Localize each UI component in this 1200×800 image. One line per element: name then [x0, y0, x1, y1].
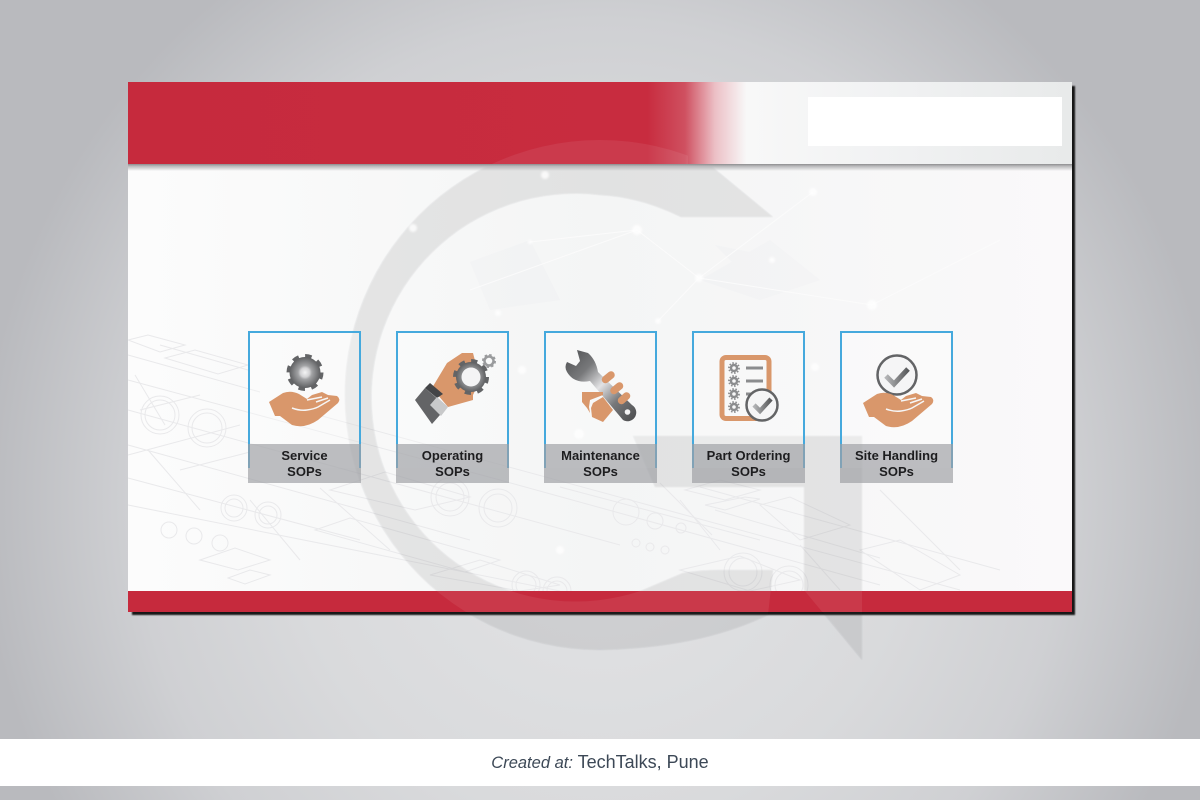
- label: Service SOPs: SOPs: [287, 464, 322, 479]
- label: Service SOPs: [248, 444, 361, 483]
- circuit pattern: [128, 335, 1000, 605]
- label: Part Ordering SOPs: Part Ordering: [707, 448, 790, 463]
- watermark on bands: [437, 140, 862, 612]
- panel: slide body: [128, 82, 1072, 612]
- credit line: [0, 739, 1200, 786]
- card: Part Ordering SOPs: [692, 331, 805, 483]
- card: Maintenance SOPs: [544, 331, 657, 483]
- label: Part Ordering SOPs: [692, 444, 805, 483]
- icon: hand gripping wrench: [566, 350, 636, 422]
- card: Site Handling SOPs: [840, 331, 953, 483]
- card: Operating SOPs: [396, 331, 509, 483]
- credit line: Created at: TechTalks, Pune: [491, 752, 709, 772]
- panel: shadow: [132, 86, 1075, 615]
- label: Part Ordering SOPs: SOPs: [731, 464, 766, 479]
- label: Operating SOPs: [396, 444, 509, 483]
- label: Service SOPs: Service: [281, 448, 328, 463]
- label: Site Handling SOPs: [840, 444, 953, 483]
- plexus dots: [409, 171, 877, 554]
- label: Maintenance SOPs: [544, 444, 657, 483]
- plexus lines: [470, 192, 1000, 321]
- footer band: [128, 591, 1072, 612]
- icon: hand holding gears: [415, 353, 496, 424]
- card: Service SOPs: [248, 331, 361, 483]
- plexus facets: [470, 240, 820, 310]
- icon: gear over hand: [269, 354, 340, 426]
- label: Operating SOPs: Operating: [422, 448, 483, 463]
- panel: slide background: [128, 82, 1076, 659]
- label: Maintenance SOPs: Maintenance: [561, 448, 640, 463]
- icon: checklist with check mark: [720, 355, 779, 422]
- header band: [128, 82, 1072, 164]
- logo placeholder box: [808, 97, 1062, 146]
- label: Site Handling SOPs: Site Handling: [855, 448, 938, 463]
- label: Operating SOPs: SOPs: [435, 464, 470, 479]
- icon: check mark over hand: [863, 354, 934, 428]
- label: Maintenance SOPs: SOPs: [583, 464, 618, 479]
- header shadow: [128, 164, 1072, 171]
- label: Site Handling SOPs: SOPs: [879, 464, 914, 479]
- watermark logo: [345, 140, 862, 660]
